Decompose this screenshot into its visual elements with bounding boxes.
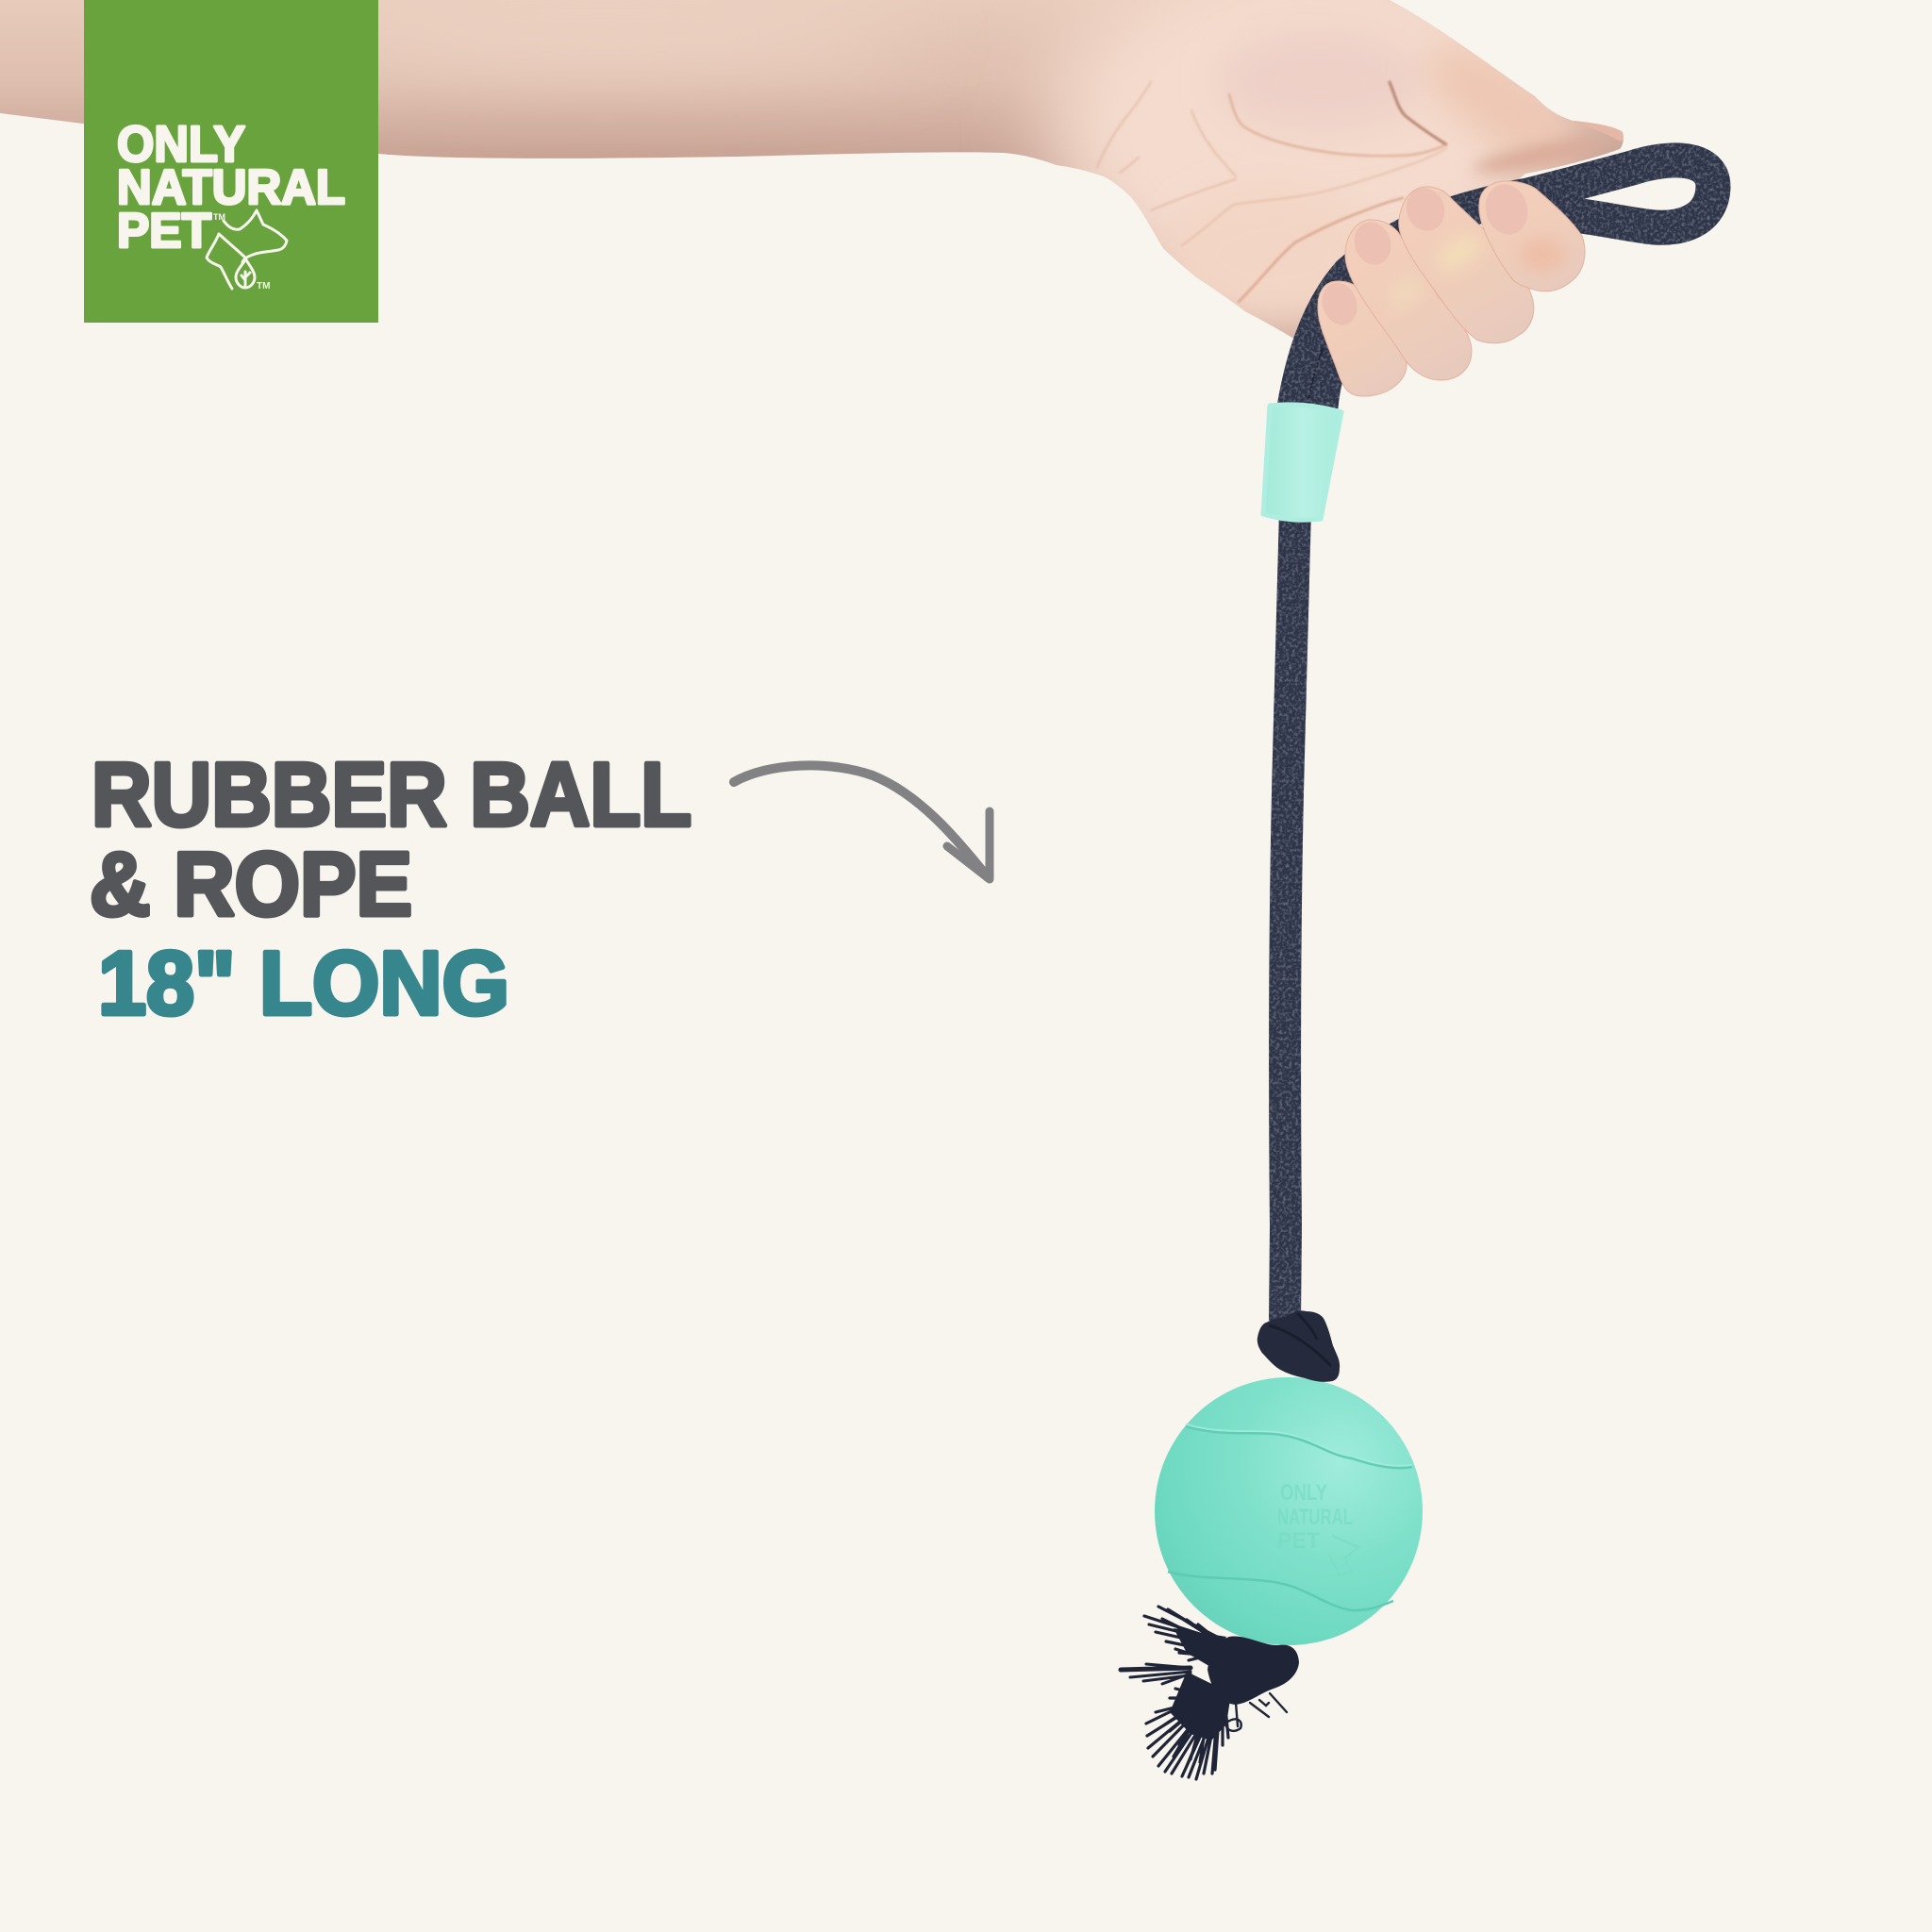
rubber ball <box>1155 1377 1423 1645</box>
rope clamp <box>1263 405 1341 520</box>
index finger <box>1479 179 1585 291</box>
arrow <box>734 765 990 879</box>
main rope <box>1285 509 1295 1321</box>
fray threads <box>1121 1607 1287 1779</box>
logo trademarks: TM <box>213 212 225 222</box>
logo wordmark: ONLY <box>117 116 245 173</box>
frayed rope end and lower knot <box>1121 1607 1299 1779</box>
logo dog and cat icon <box>207 210 287 289</box>
upper knot <box>1260 1313 1337 1379</box>
embossed logo on ball <box>1277 1480 1358 1575</box>
soft skin shading <box>292 0 1605 321</box>
embossed logo on ball: PET <box>1277 1528 1320 1554</box>
heading: 18 inch long: 18" LONG <box>98 933 509 1034</box>
middle finger <box>1399 183 1534 343</box>
heading: rubber ball and rope: & ROPE <box>90 834 412 935</box>
heading: rubber ball and rope: RUBBER BALL <box>92 744 691 845</box>
rope loop held in hand <box>1294 160 1713 408</box>
heading: rubber ball and rope <box>90 744 691 935</box>
lower knot <box>1208 1637 1299 1705</box>
logo panel <box>84 0 378 323</box>
ring finger <box>1345 217 1472 380</box>
logo wordmark: NATURAL <box>117 160 345 215</box>
thumb nail <box>1573 121 1624 141</box>
logo wordmark <box>117 116 345 258</box>
arm and palm <box>0 0 1624 349</box>
fingers gripping the rope <box>1316 121 1624 396</box>
palm creases <box>1097 82 1446 302</box>
little finger <box>1316 277 1407 396</box>
embossed logo on ball: NATURAL <box>1277 1505 1353 1530</box>
embossed logo on ball: ONLY <box>1280 1480 1327 1506</box>
logo trademarks: TM <box>257 281 270 291</box>
ball seams <box>1168 1424 1412 1610</box>
logo wordmark: PET <box>117 204 211 258</box>
logo trademarks <box>213 212 270 291</box>
